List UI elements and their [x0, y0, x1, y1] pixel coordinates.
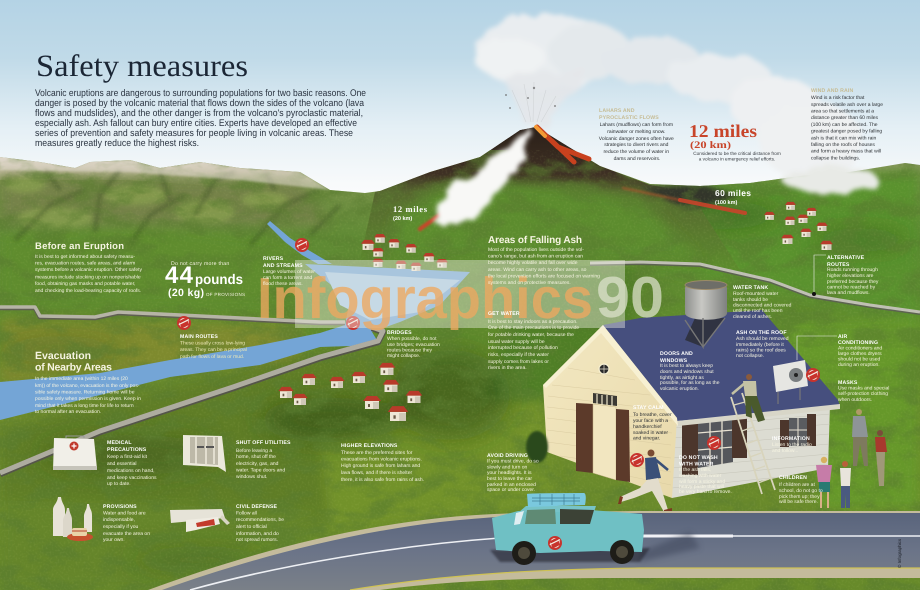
- warning signs: [177, 238, 820, 467]
- areas of falling ash: It is best to stay indoors as a precaution.: [488, 319, 578, 325]
- civil defense: CIVIL DEFENSE: [236, 504, 277, 510]
- wind and rain text block: WIND AND RAIN: [811, 88, 853, 94]
- ladder and man on roof: [731, 374, 775, 494]
- avoid driving: best to leave the car: [487, 476, 532, 482]
- air conditioning note: large clothes dryers: [838, 351, 882, 357]
- water tank note: until the roof has been: [733, 308, 783, 314]
- avoid driving: parked in an enclosed: [487, 482, 536, 488]
- stay calm note: To breathe, cover: [633, 412, 672, 418]
- wind and rain text block: ash is that it can mix with rain: [811, 136, 877, 142]
- ash on the roof note: Ash should be removed: [736, 336, 789, 342]
- evacuation of nearby areas: Evacuation: [35, 350, 91, 362]
- alternative routes: [812, 255, 879, 296]
- ash fall over the right hills: [782, 166, 878, 196]
- wind and rain text block: collapse the buildings.: [811, 156, 860, 162]
- stay calm note: soaked in water: [633, 430, 668, 436]
- lahars body: Volcanic danger zones often have: [599, 136, 674, 142]
- 12 miles marker on mountain: (20 km): [393, 216, 412, 222]
- civil defense: recommendations, be: [236, 517, 284, 523]
- bridges: [387, 330, 440, 359]
- before an eruption: measures include stocking up on nonperishable: [35, 274, 141, 280]
- evacuation of nearby areas: of Nearby Areas: [35, 362, 112, 374]
- intro paragraph: Volcanic eruptions are dangerous to surrounding populations for two basic reasons. One: [35, 88, 366, 99]
- before an eruption: [35, 241, 143, 294]
- before an eruption: res, evacuation routes, safe areas, and alarm: [35, 260, 135, 266]
- 12 miles marker on mountain: [393, 204, 428, 222]
- 44 pounds callout: 44: [165, 262, 194, 289]
- evacuation of nearby areas: [35, 350, 142, 415]
- alternative routes: preferred because they: [827, 279, 879, 285]
- adult woman: [875, 430, 887, 486]
- alternative routes: Roads running through: [827, 267, 878, 273]
- before an eruption: food, obtaining gas masks and potable water,: [35, 281, 135, 287]
- higher elevations: lava flows, and if there is shelter: [341, 470, 412, 476]
- information note: and follow...: [772, 448, 798, 454]
- shut off utilities: electricity, gas, and: [236, 461, 279, 467]
- man on ladder: [732, 374, 765, 422]
- areas of falling ash: Areas of Falling Ash: [488, 235, 582, 246]
- wind and rain text block: and form a heavy mass that will: [811, 148, 881, 154]
- hill highlights: [5, 177, 289, 229]
- medical precautions: Keep a first-aid kit: [107, 454, 148, 460]
- provisions: [103, 504, 150, 543]
- doors and windows note: WINDOWS: [660, 358, 688, 364]
- medical precautions: PRECAUTIONS: [107, 447, 147, 453]
- children note: CHILDREN: [779, 475, 807, 481]
- sky background: [0, 0, 920, 230]
- snowy ridge: [0, 157, 322, 186]
- evacuation of nearby areas: to normal after an evacuation.: [35, 409, 101, 415]
- water tank note: tanks should be: [733, 297, 768, 303]
- areas of falling ash: the local prevention efforts are focused on warning: [488, 274, 600, 280]
- higher elevations: High ground is safe from lahars and: [341, 463, 420, 469]
- evacuation of nearby areas: km)) of the volcano, evacuation is the only pos-: [35, 383, 140, 389]
- main routes: MAIN ROUTES: [180, 334, 218, 340]
- lahars body: reduce the volume of water in: [604, 149, 669, 155]
- higher elevations: These are the preferred sites for: [341, 450, 413, 456]
- stay calm note: [633, 405, 672, 442]
- doors and windows note: volcanic eruption.: [660, 386, 699, 392]
- lahars heading: PYROCLASTIC FLOWS: [599, 115, 659, 121]
- credit: © Infographics: [897, 538, 902, 568]
- before an eruption: Before an Eruption: [35, 241, 124, 252]
- water tank note: Roof-mounted water: [733, 291, 779, 297]
- do not wash with water note: [679, 455, 732, 495]
- main routes: path for flows of lava or mud.: [180, 354, 244, 360]
- shut off utilities: windows shut.: [236, 474, 267, 480]
- evacuation of nearby areas: sible safety measure. Returning home will be: [35, 390, 135, 396]
- lahars heading: LAHARS AND: [599, 108, 635, 114]
- 60 miles marker: 60 miles: [715, 188, 751, 198]
- intro paragraph: danger is posed by the volcanic material that flows down the sides of the volcano (lava: [35, 98, 365, 109]
- civil defense: [236, 504, 284, 543]
- 12 miles callout: 12 miles: [689, 121, 757, 141]
- areas of falling ash: areas. Wind can carry ash to other areas, so: [488, 267, 587, 273]
- higher elevations: evacuations from volcanic eruptions.: [341, 456, 422, 462]
- avoid driving: slowly and turn on: [487, 464, 528, 470]
- stay calm note: your face with a: [633, 418, 668, 424]
- masks note: [838, 380, 889, 403]
- side window: [780, 414, 816, 447]
- areas of falling ash: supply comes from lakes or: [488, 359, 549, 365]
- air conditioning note: AIR: [838, 334, 847, 340]
- wind and rain text block: spreads volatile ash over a large: [811, 102, 883, 108]
- masks note: MASKS: [838, 380, 858, 386]
- do not wash with water note: washing with water: [679, 473, 722, 479]
- areas of falling ash: for potable drinking water, because the: [488, 332, 574, 338]
- river: [0, 221, 470, 420]
- watermark: Infographics: [257, 266, 593, 331]
- information note: Listen to the radio: [772, 442, 812, 448]
- civil defense: alert to official: [236, 524, 267, 530]
- air conditioning unit: [773, 360, 808, 404]
- 44 pounds callout: OF PROVISIONS: [206, 292, 245, 297]
- group of people: [816, 409, 887, 508]
- before an eruption: It is best to get informed about safety measu-: [35, 254, 135, 260]
- areas of falling ash: One of the main precautions is to provide: [488, 325, 579, 331]
- medical precautions: up to date.: [107, 481, 131, 487]
- lahars body: rainwater or melting snow.: [607, 129, 665, 135]
- 12 miles callout: Considered to be the critical distance from: [693, 151, 781, 156]
- doors and windows note: doors and windows shut: [660, 369, 714, 375]
- do not wash with water note: will form a sticky and: [679, 479, 725, 485]
- masks note: Use masks and special: [838, 386, 889, 392]
- wind and rain text block: (100 km) can be affected. The: [811, 122, 878, 128]
- ash on the roof note: ASH ON THE ROOF: [736, 330, 787, 336]
- water tank note: WATER TANK: [733, 285, 768, 291]
- house: roof: [603, 310, 840, 421]
- higher elevations: [341, 443, 424, 483]
- volcano: [360, 127, 740, 270]
- areas of falling ash: usual water supply will be: [488, 339, 545, 345]
- children note: pick them up; they: [779, 494, 820, 500]
- information note: INFORMATION: [772, 436, 810, 442]
- avoid driving: your headlights. It is: [487, 470, 532, 476]
- lava flows: [420, 127, 745, 229]
- shut off utilities: Before leaving a: [236, 448, 272, 454]
- landscape ground: [0, 127, 920, 590]
- rivers and streams: RIVERS: [263, 256, 284, 262]
- no-sign on car: [548, 536, 562, 550]
- 12 miles callout: (20 km): [690, 140, 731, 151]
- icon: utility cabinet: [183, 435, 226, 472]
- wind and rain text block: falling on the roofs of houses: [811, 142, 875, 148]
- do not wash with water note: DO NOT WASH: [679, 455, 718, 461]
- avoid driving: AVOID DRIVING: [487, 453, 528, 459]
- air conditioning note: during an eruption.: [838, 362, 880, 368]
- doors and windows note: tightly, as airtight as: [660, 375, 704, 381]
- ash on the roof note: not collapse.: [736, 353, 764, 359]
- 60 miles marker: [715, 188, 751, 206]
- do not wash with water note: heavy paste that will: [679, 484, 724, 490]
- lahars body: Lahars (mudflows) can form from: [600, 122, 673, 128]
- alternative routes: higher elevations are: [827, 273, 874, 279]
- 44 pounds callout: (20 kg): [168, 287, 204, 299]
- 44 pounds callout: Do not carry more than: [171, 261, 230, 267]
- masks note: when outdoors.: [838, 397, 872, 403]
- children note: [779, 475, 823, 505]
- medical precautions: [107, 440, 157, 487]
- 12 miles callout: [689, 121, 781, 162]
- main routes: [180, 334, 247, 360]
- rivers and streams: flood these areas.: [263, 281, 303, 287]
- shut off utilities: water. Tape doors and: [236, 468, 285, 474]
- information note: [772, 436, 812, 454]
- adult with mask: [852, 409, 868, 466]
- icon: radio and flashlight: [170, 509, 230, 532]
- main road: [148, 511, 920, 590]
- bridges: might collapse.: [387, 353, 420, 359]
- areas of falling ash: Most of the population lives outside the vol-: [488, 247, 584, 253]
- wind and rain text block: [811, 88, 884, 162]
- eruption ash cloud: [474, 14, 862, 178]
- avoid driving: If you must drive, do so: [487, 458, 539, 464]
- door and shutters: [576, 393, 630, 482]
- water tank note: cleaned of ashes.: [733, 314, 772, 320]
- 12 miles marker on mountain: 12 miles: [393, 204, 428, 214]
- bridges: routes because they: [387, 348, 433, 354]
- doors and windows note: DOORS AND: [660, 351, 693, 357]
- wind and rain text block: distance greater than 60 miles: [811, 115, 878, 121]
- lahars body: strategies to divert rivers and: [604, 142, 669, 148]
- lahars body: dams and reservoirs.: [614, 156, 660, 162]
- rivers and streams: AND STREAMS: [263, 263, 303, 269]
- areas of falling ash: cano's range, but ash from an eruption can: [488, 254, 583, 260]
- stay calm note: and vinegar.: [633, 436, 660, 442]
- children note: will be safe there.: [779, 499, 818, 505]
- medical precautions: MEDICAL: [107, 440, 132, 446]
- water tank: [685, 280, 727, 347]
- stay calm note: STAY CALM: [633, 405, 664, 411]
- watermark: 90: [596, 265, 664, 330]
- texture: [0, 150, 920, 590]
- doors and windows note: It is best to always keep: [660, 363, 713, 369]
- ash on the roof note: rains) so the roof does: [736, 348, 786, 354]
- ash on the roof note: immediately (before it: [736, 342, 784, 348]
- medical precautions: medications on hand,: [107, 468, 155, 474]
- before an eruption: systems before a volcanic eruption. Other safety: [35, 267, 142, 273]
- intro paragraph: series of prevention and safety measures for people living in volcanic areas. These: [35, 128, 353, 139]
- bridges: When possible, do not: [387, 336, 437, 342]
- bridges: BRIDGES: [387, 330, 412, 336]
- children note: school, do not go to: [779, 488, 823, 494]
- bush: [526, 431, 548, 463]
- girl: [816, 457, 832, 508]
- areas of falling ash: rivers in the area.: [488, 365, 527, 371]
- icon: first aid kit: [53, 436, 97, 470]
- hill ravines: [15, 170, 340, 245]
- do not wash with water note: be very hard to remove.: [679, 489, 732, 495]
- provisions: your own.: [103, 537, 125, 543]
- house: side wall: [672, 404, 830, 498]
- avoid driving: space or under cover.: [487, 487, 535, 493]
- provisions: Water and food are: [103, 510, 146, 516]
- masks note: self-protection clothing: [838, 391, 888, 397]
- civil defense: information, and do: [236, 531, 279, 537]
- avoid driving: [487, 453, 539, 493]
- 12 miles callout: a volcano in emergency relief efforts.: [699, 156, 775, 162]
- do not wash with water note: WITH WATER: [679, 462, 714, 468]
- main routes: areas. They can be a principal: [180, 347, 247, 353]
- running man: [618, 450, 672, 513]
- higher elevations: HIGHER ELEVATIONS: [341, 443, 398, 449]
- provisions: especially if you: [103, 524, 139, 530]
- medical precautions: and essential: [107, 461, 136, 467]
- roads: [0, 262, 920, 474]
- areas of falling ash: GET WATER: [488, 311, 520, 317]
- house: front gable wall: [543, 325, 678, 498]
- medical precautions: and keep vaccinations: [107, 475, 157, 481]
- 60 miles marker: (100 km): [715, 200, 737, 206]
- intro paragraph: measures greatly reduce the highest risks.: [35, 138, 199, 149]
- intro paragraph: especially ash. Ash fallout can bury entire cities. Experts have developed an effective: [35, 118, 357, 129]
- rivers and streams: [263, 256, 315, 287]
- boy: [840, 461, 851, 508]
- rivers and streams: Large volumes of water: [263, 269, 315, 275]
- civil defense: not spread rumors.: [236, 537, 278, 543]
- evacuation of nearby areas: mind that it takes a long time for life to return: [35, 403, 134, 409]
- areas of falling ash: interrupted because of pollution: [488, 345, 558, 351]
- air conditioning note: should not be used: [838, 356, 880, 362]
- rivers and streams: can form a torrent and: [263, 275, 312, 281]
- alternative routes: ALTERNATIVE: [827, 255, 865, 261]
- higher elevations: there, it is also safe from rains of ash.: [341, 477, 424, 483]
- shut off utilities: [236, 440, 291, 480]
- alternative routes: lava and mudflows.: [827, 290, 870, 296]
- shut off utilities: home, shut off the: [236, 454, 276, 460]
- bridges: use bridges; evacuation: [387, 342, 440, 348]
- water tank note: [733, 285, 792, 320]
- do not wash with water note: If the ash falls,: [679, 467, 711, 473]
- doors and windows note: [660, 351, 720, 392]
- shut off utilities: SHUT OFF UTILITIES: [236, 440, 291, 446]
- provisions: evacuate the area on: [103, 531, 150, 537]
- civil defense: Follow all: [236, 510, 257, 516]
- areas of falling ash: systems and on protective measures.: [488, 280, 571, 286]
- alternative routes: cannot be reached by: [827, 284, 876, 290]
- evacuation of nearby areas: possible only when permission is given. Keep in: [35, 396, 141, 402]
- window with shutters: [682, 413, 747, 475]
- air conditioning note: CONDITIONING: [838, 340, 878, 346]
- intro paragraph: flows and mudslides), and the other danger is from the volcano's pyroclastic material,: [35, 108, 363, 119]
- doors and windows note: possible, for as long as the: [660, 380, 720, 386]
- alternative routes: ROUTES: [827, 262, 850, 268]
- lahars text block: [599, 108, 675, 162]
- air conditioning note: [797, 334, 882, 368]
- stay calm note: handkerchief: [633, 424, 662, 430]
- before an eruption: and checking the load-bearing capacity of roofs.: [35, 288, 141, 294]
- water tank note: disconnected and covered: [733, 302, 792, 308]
- ash on the roof note: [736, 330, 789, 359]
- areas of falling ash: [488, 235, 601, 371]
- main routes: These usually cross low-lying: [180, 340, 245, 346]
- 44 pounds callout: pounds: [195, 271, 243, 287]
- villages: [278, 202, 833, 421]
- air conditioning note: Air conditioners and: [838, 346, 882, 352]
- provisions: PROVISIONS: [103, 504, 137, 510]
- wind and rain text block: Wind is a risk factor that: [811, 95, 865, 101]
- icon: water bottles and food: [53, 497, 93, 541]
- title: Safety measures: [36, 48, 248, 83]
- car: [490, 493, 650, 565]
- wind and rain text block: area so that settlements at a: [811, 108, 874, 114]
- children note: If children are at: [779, 482, 815, 488]
- 44 pounds callout: [165, 261, 245, 299]
- provisions: indispensable,: [103, 517, 135, 523]
- pyroclastic steam plume: [434, 128, 531, 228]
- wind and rain text block: greatest danger posed by falling: [811, 128, 882, 134]
- areas of falling ash: become highly volatile and fall over wide: [488, 260, 578, 266]
- areas of falling ash: risks, especially if the water: [488, 352, 549, 358]
- evacuation of nearby areas: In the immediate area (within 12 miles (20: [35, 376, 128, 382]
